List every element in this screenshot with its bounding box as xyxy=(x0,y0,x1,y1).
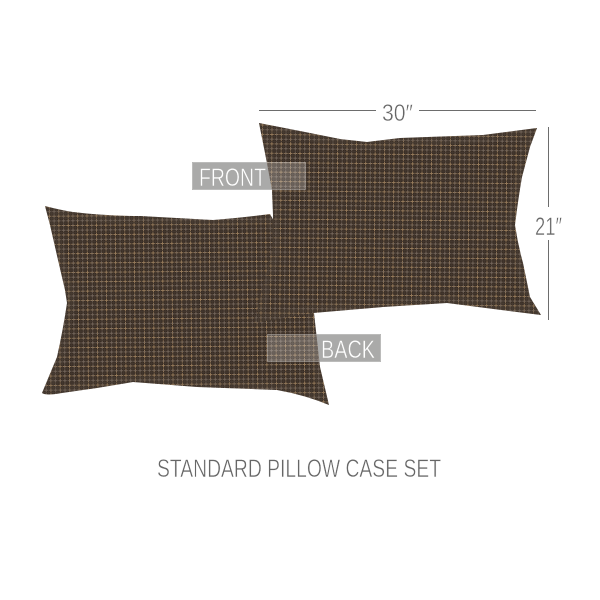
dimension: height 21 inches: 21″ xyxy=(535,213,562,241)
label background: BACK xyxy=(267,334,381,362)
caption: STANDARD PILLOW CASE SET xyxy=(157,455,441,483)
dimension: width 30 inches: 30″ xyxy=(382,100,413,127)
label background: FRONT xyxy=(192,162,306,190)
label text: BACK: BACK xyxy=(321,336,375,364)
pillow: front xyxy=(42,206,329,405)
label overlay: BACK xyxy=(268,334,380,362)
infographic canvas xyxy=(42,104,562,477)
pillow: back xyxy=(254,123,541,323)
label overlay: FRONT xyxy=(192,162,306,190)
label text: FRONT: FRONT xyxy=(199,164,266,192)
